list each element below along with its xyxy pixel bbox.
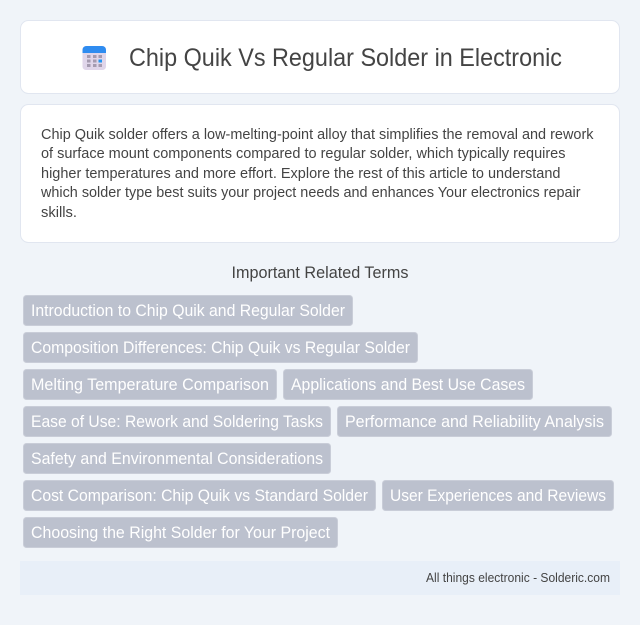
tag: introduction: Introduction to Chip Quik and Regular Solder	[31, 301, 345, 320]
tag: safety	[24, 444, 330, 474]
intro text block	[40, 126, 594, 221]
tag: melting temperature: Melting Temperature Comparison	[31, 375, 269, 394]
panel: introduction	[20, 104, 620, 242]
related term tags	[24, 296, 614, 548]
tag: cost	[24, 480, 376, 510]
intro text block: Chip Quik solder offers a low-melting-point alloy that simplifies the removal and rework	[41, 126, 594, 143]
tag: melting temperature	[24, 370, 276, 400]
intro text block: of surface mount components compared to regular solder, which typically requires	[41, 145, 566, 162]
tag: cost: Cost Comparison: Chip Quik vs Standard Solder	[31, 486, 368, 505]
tag: introduction	[24, 296, 352, 326]
tag: applications	[284, 370, 532, 400]
intro text block: higher temperatures and more effort. Explore the rest of this article to understand	[41, 165, 560, 182]
tag: user experiences: User Experiences and Reviews	[390, 486, 606, 505]
tag: ease of use	[24, 406, 330, 436]
tag: ease of use: Ease of Use: Rework and Soldering Tasks	[31, 412, 323, 431]
footer	[20, 561, 620, 595]
tag: choosing: Choosing the Right Solder for Your Project	[31, 523, 330, 542]
tag: applications: Applications and Best Use Cases	[291, 375, 525, 394]
heading: important related terms: Important Related Terms	[232, 264, 408, 282]
tag: choosing	[24, 518, 338, 548]
intro text block: which solder type best suits your project needs and enhances Your electronics repair	[40, 184, 580, 201]
tag: safety: Safety and Environmental Considerations	[31, 449, 323, 468]
icon: calendar	[82, 46, 106, 70]
tag: performance	[338, 406, 612, 436]
tag: user experiences	[382, 480, 614, 510]
footer credit: All things electronic - Solderic.com	[426, 571, 610, 585]
header panel	[20, 20, 620, 94]
title: Chip Quik Vs Regular Solder in Electronic	[129, 44, 562, 72]
tag: composition: Composition Differences: Chip Quik vs Regular Solder	[31, 338, 410, 357]
tag: performance: Performance and Reliability Analysis	[345, 412, 604, 431]
tag: composition	[24, 332, 418, 362]
intro text block: skills.	[41, 204, 77, 221]
